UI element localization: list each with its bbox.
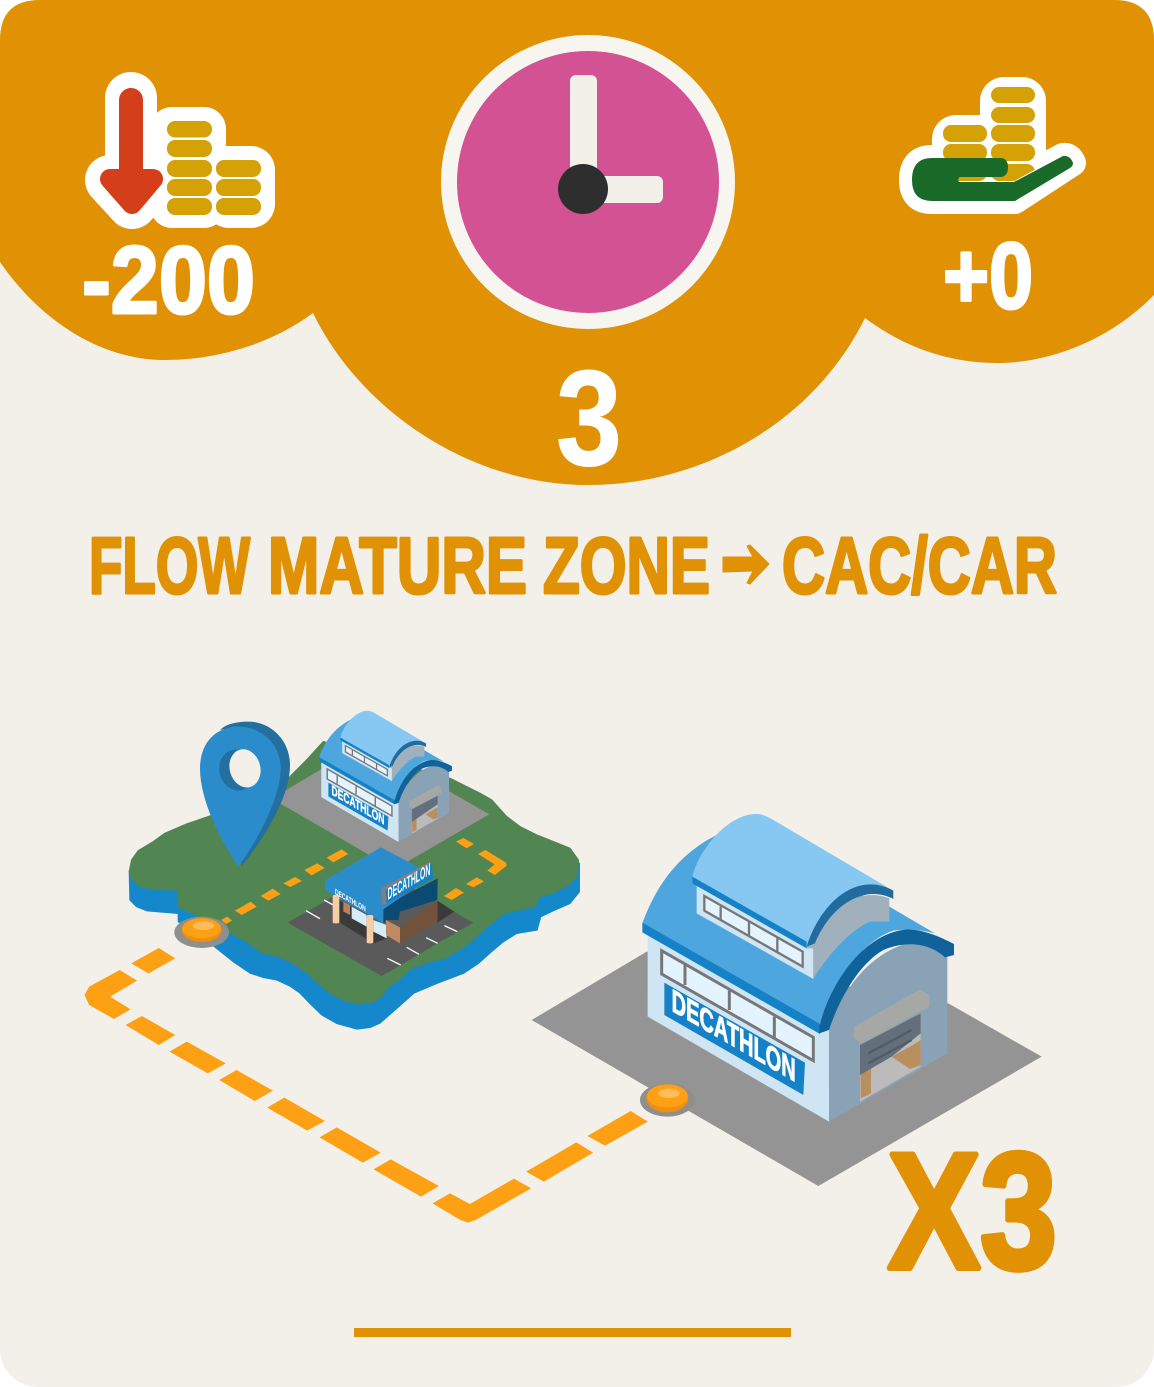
- loading door: [854, 989, 929, 1102]
- multiplier: X3: [888, 1119, 1057, 1303]
- store sign: [664, 983, 805, 1095]
- icon: cost down arrow with coins: [110, 98, 275, 228]
- title: MATURE: [268, 521, 527, 610]
- title: CAC/CAR: [782, 521, 1057, 610]
- cost value: -200: [82, 227, 255, 334]
- small warehouse store: DECATHLON: [331, 783, 384, 829]
- road dashes on island: [221, 838, 507, 924]
- main roof: [642, 835, 935, 1027]
- time value: 3: [556, 342, 622, 494]
- island with small stores: [129, 711, 579, 1029]
- front wall: [648, 933, 829, 1122]
- icon: hand holding coins: [912, 77, 1073, 201]
- store sign: DECATHLON: [672, 983, 796, 1090]
- side wall: [829, 943, 947, 1122]
- title: ZONE: [543, 521, 710, 610]
- island water base: [129, 863, 579, 1029]
- title: [89, 521, 1057, 610]
- store parking apron: [532, 952, 1042, 1186]
- bonus value: +0: [943, 223, 1033, 328]
- bottom rule: [354, 1328, 791, 1337]
- dashed route: [85, 948, 648, 1223]
- small sports shop: [325, 847, 454, 943]
- island grass: [129, 742, 578, 1004]
- large warehouse store: [532, 814, 1042, 1186]
- small sports shop: DECATHLON: [388, 860, 430, 904]
- small sports shop: DECATHLON: [335, 887, 366, 914]
- front windows: [662, 951, 813, 1061]
- title: FLOW: [89, 521, 250, 610]
- small warehouse store: [272, 711, 489, 869]
- upper storey: [692, 814, 893, 979]
- start marker: [174, 917, 229, 948]
- icon: clock: [449, 43, 727, 321]
- parking lot: [288, 870, 473, 976]
- icon: location pin: [200, 722, 290, 867]
- header banner: [0, 0, 1154, 485]
- end marker: [640, 1083, 695, 1117]
